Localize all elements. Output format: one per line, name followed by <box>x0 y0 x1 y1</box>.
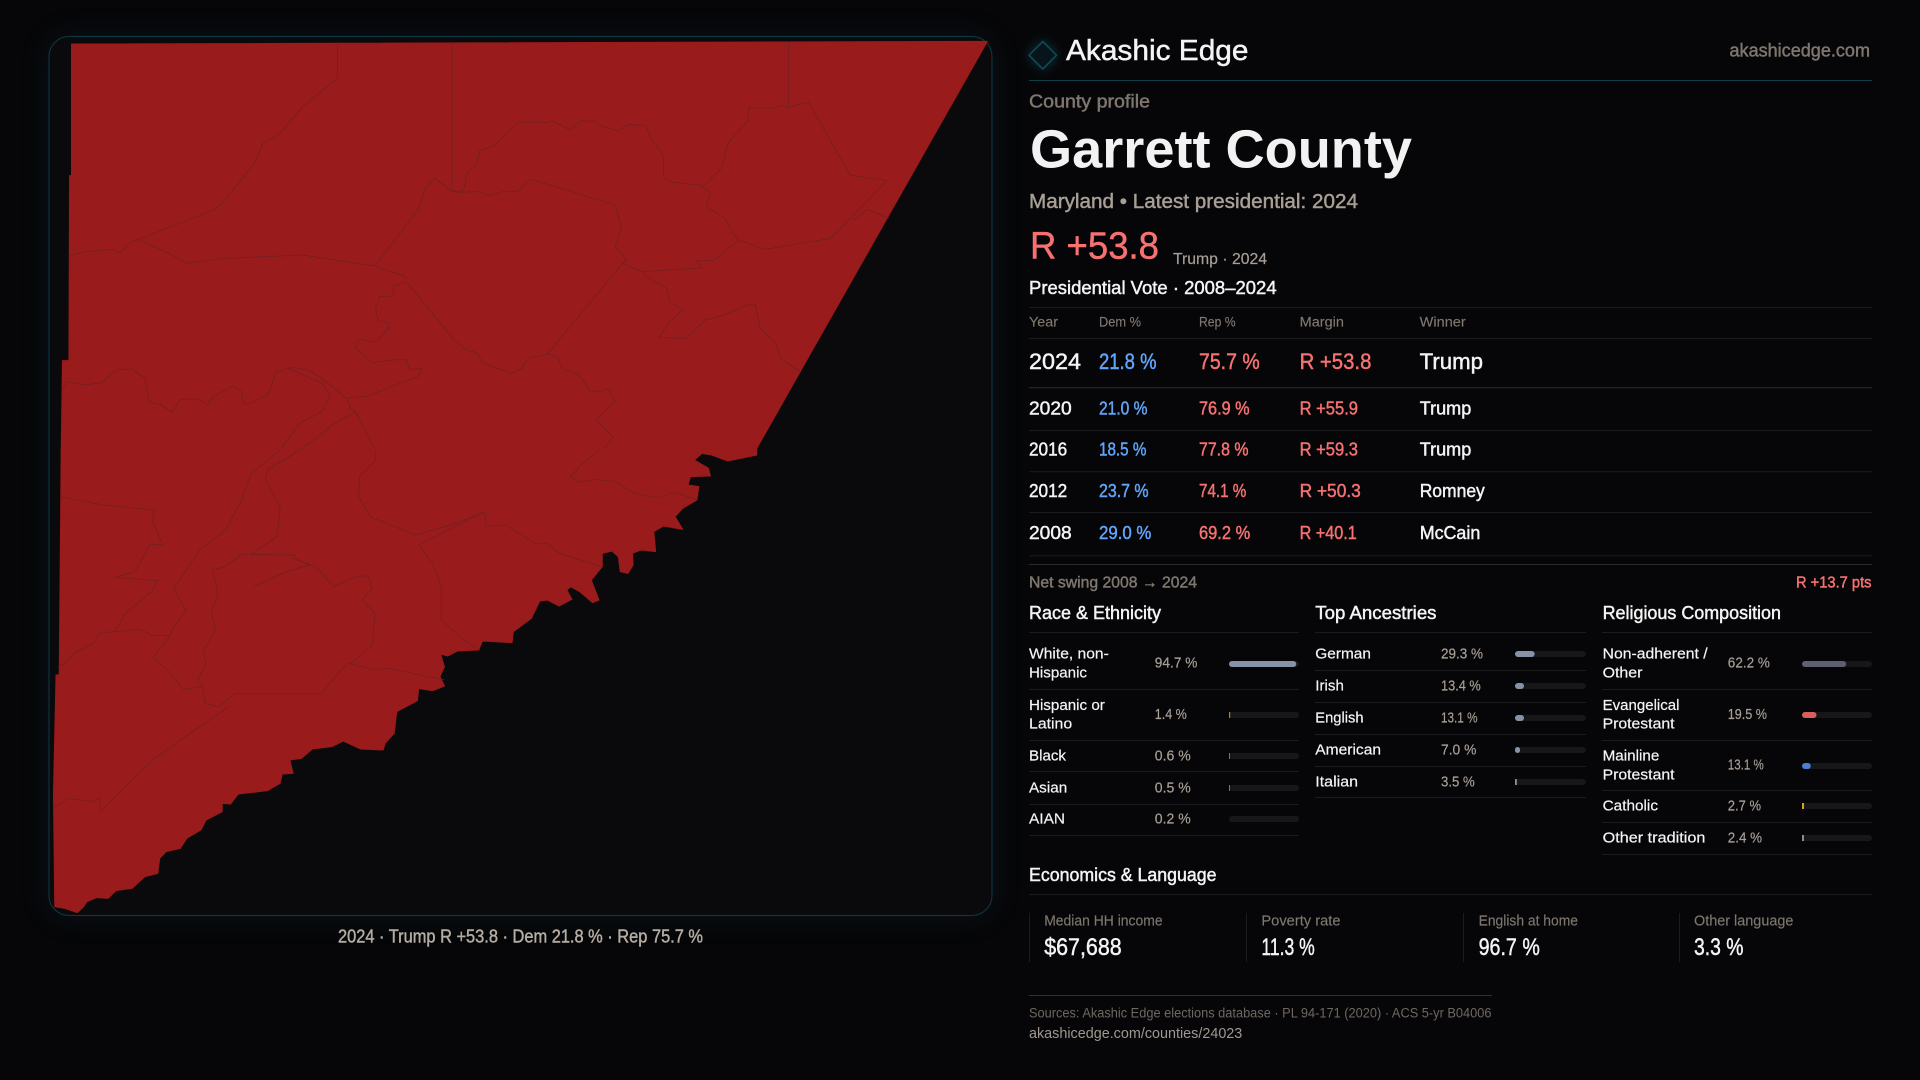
row: mainline: Protestant <box>1603 766 1675 783</box>
table header row: Rep % <box>1199 315 1236 330</box>
row: other tradition: Other tradition <box>1603 830 1705 847</box>
row: Italian <box>1315 773 1586 790</box>
row: mainline: Mainline <box>1603 748 1659 765</box>
footer: sources: akashicedge.com/counties/24023 <box>1029 1026 1242 1042</box>
row: AIAN <box>1029 810 1299 827</box>
row: Asian: 0.5 % <box>1155 780 1191 797</box>
row 2024: R +53.8 <box>1300 349 1371 374</box>
row: AIAN: AIAN <box>1029 810 1065 827</box>
row: English: English <box>1315 709 1364 726</box>
row: Catholic <box>1603 798 1872 815</box>
row: evangelical <box>1603 697 1872 733</box>
row: Catholic: 2.7 % <box>1728 798 1761 815</box>
table header row: Dem % <box>1099 315 1141 330</box>
stat: median household income: Median HH income <box>1044 912 1163 929</box>
site url: akashicedge.com <box>1730 41 1870 61</box>
row 2016: 77.8 % <box>1199 439 1248 459</box>
row: evangelical: Evangelical <box>1603 697 1680 714</box>
header: brand bar <box>1029 35 1872 80</box>
county profile eyebrow: County profile <box>1029 92 1150 112</box>
net swing row <box>1029 564 1872 592</box>
subtitle: Maryland • Latest presidential: 2024 <box>1029 191 1358 213</box>
row: German: 29.3 % <box>1441 645 1483 662</box>
net swing row: R +13.7 pts <box>1796 575 1872 592</box>
row 2020: 76.9 % <box>1199 398 1250 418</box>
row: Catholic: Catholic <box>1603 798 1658 815</box>
footer: sources <box>1029 996 1492 1042</box>
row: non-adherent: Non-adherent / <box>1603 645 1708 662</box>
headline margin: Trump · 2024 <box>1173 251 1267 268</box>
row: German: German <box>1315 645 1371 662</box>
row 2008: 2008 <box>1029 523 1072 543</box>
map: Garrett County precincts <box>53 41 987 913</box>
table heading: Presidential Vote · 2008–2024 <box>1029 278 1277 298</box>
row 2016 <box>1029 439 1471 459</box>
title: county name: Garrett County <box>1030 120 1412 180</box>
stat: poverty rate: Poverty rate <box>1261 912 1340 929</box>
stat: poverty rate: 11.3 % <box>1261 934 1315 961</box>
row: Irish <box>1315 677 1586 694</box>
icon: brand diamond <box>1029 42 1056 69</box>
row: non-adherent: 62.2 % <box>1728 655 1770 672</box>
row 2012: 23.7 % <box>1099 481 1149 501</box>
row: evangelical: 19.5 % <box>1728 706 1767 723</box>
heading: Religious Composition <box>1603 603 1781 623</box>
row 2008: R +40.1 <box>1300 523 1357 543</box>
row: Black: 0.6 % <box>1155 748 1191 765</box>
row: white non-Hispanic <box>1029 645 1299 681</box>
row 2016: 2016 <box>1029 439 1067 459</box>
row 2012: Romney <box>1420 481 1485 501</box>
row: Hispanic or Latino: Latino <box>1029 716 1072 733</box>
row: English <box>1315 709 1586 726</box>
map caption: 2024 · Trump R +53.8 · Dem 21.8 % · Rep 75.7 % <box>338 926 703 946</box>
row: white non-Hispanic: 94.7 % <box>1155 655 1197 672</box>
row 2008: McCain <box>1420 523 1480 543</box>
headline margin: R +53.8 <box>1030 226 1159 268</box>
row: non-adherent <box>1603 645 1872 681</box>
row 2024: 21.8 % <box>1099 349 1156 374</box>
table: presidential vote <box>1029 308 1872 556</box>
stat: other language: 3.3 % <box>1694 934 1744 961</box>
row 2012: 2012 <box>1029 481 1067 501</box>
table header row: Margin <box>1300 315 1344 330</box>
row: white non-Hispanic: Hispanic <box>1029 664 1087 681</box>
row 2016: R +59.3 <box>1300 439 1358 459</box>
row 2012 <box>1029 481 1485 501</box>
row: white non-Hispanic: White, non- <box>1029 645 1109 662</box>
panel: top ancestries <box>1315 603 1586 798</box>
row: Asian <box>1029 780 1299 797</box>
row: Irish: 13.4 % <box>1441 677 1481 694</box>
row 2008 <box>1029 523 1480 543</box>
row 2024: 2024 <box>1029 349 1081 374</box>
table header row: Year <box>1029 315 1059 330</box>
row 2008: 69.2 % <box>1199 523 1250 543</box>
stat: other language <box>1680 912 1793 962</box>
row 2024: 75.7 % <box>1199 349 1260 374</box>
row: Irish: Irish <box>1315 677 1344 694</box>
row: German <box>1315 645 1586 662</box>
net swing row: Net swing 2008 → 2024 <box>1029 575 1197 592</box>
row 2020: 2020 <box>1029 398 1072 418</box>
row: Hispanic or Latino <box>1029 697 1299 733</box>
row: American <box>1315 741 1586 758</box>
row 2024: Trump <box>1420 349 1483 374</box>
row: Black: Black <box>1029 748 1066 765</box>
row: American: 7.0 % <box>1441 741 1476 758</box>
row: Italian: Italian <box>1315 773 1358 790</box>
heading: Race & Ethnicity <box>1029 603 1161 623</box>
stat: English at home <box>1464 912 1578 962</box>
table header row: Winner <box>1420 315 1466 330</box>
row: other tradition: 2.4 % <box>1728 830 1762 847</box>
heading: Economics & Language <box>1029 865 1216 885</box>
row: Black <box>1029 748 1299 765</box>
panel: race and ethnicity <box>1029 603 1299 836</box>
headline margin <box>1030 226 1267 268</box>
row: Italian: 3.5 % <box>1441 773 1475 790</box>
row: mainline <box>1603 748 1872 783</box>
row 2020: Trump <box>1420 398 1471 418</box>
row: Hispanic or Latino: Hispanic or <box>1029 697 1105 714</box>
row: mainline: 13.1 % <box>1728 757 1764 774</box>
row: Hispanic or Latino: 1.4 % <box>1155 706 1187 723</box>
brand name: Akashic Edge <box>1066 35 1248 67</box>
row 2020: 21.0 % <box>1099 398 1148 418</box>
row: Asian: Asian <box>1029 780 1067 797</box>
stat: English at home: 96.7 % <box>1479 934 1540 961</box>
stat: poverty rate <box>1246 912 1340 962</box>
row: non-adherent: Other <box>1603 664 1643 681</box>
footer: sources: Sources: Akashic Edge elections database · PL 94-171 (2020) · ACS 5-yr B04006 <box>1029 1005 1492 1020</box>
row 2020: R +55.9 <box>1300 398 1358 418</box>
stat: English at home: English at home <box>1479 912 1578 929</box>
row: AIAN: 0.2 % <box>1155 810 1191 827</box>
row: evangelical: Protestant <box>1603 716 1675 733</box>
panel: religious composition <box>1602 603 1872 854</box>
row: American: American <box>1315 741 1381 758</box>
row: other tradition <box>1603 830 1872 847</box>
row 2024 <box>1029 349 1483 374</box>
row 2012: R +50.3 <box>1300 481 1361 501</box>
panel: economics and language <box>1029 865 1872 962</box>
row 2016: 18.5 % <box>1099 439 1146 459</box>
row 2012: 74.1 % <box>1199 481 1246 501</box>
row: English: 13.1 % <box>1441 709 1478 726</box>
stat: median household income <box>1030 912 1163 962</box>
stat: median household income: $67,688 <box>1044 934 1122 961</box>
heading: Top Ancestries <box>1315 603 1436 623</box>
stat: other language: Other language <box>1694 912 1793 929</box>
table header row <box>1029 315 1466 330</box>
row 2016: Trump <box>1420 439 1471 459</box>
row 2008: 29.0 % <box>1099 523 1151 543</box>
panel: county map <box>49 36 992 916</box>
row 2020 <box>1029 398 1471 418</box>
